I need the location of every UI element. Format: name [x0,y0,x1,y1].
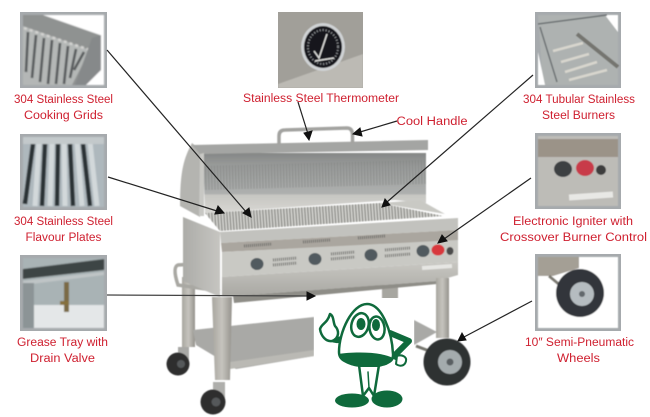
photo [23,258,104,328]
grate slats [26,32,84,84]
left side panel [183,217,220,297]
label: igniter: Crossover Burner Control [500,232,647,244]
label: cooking grids: 304 Stainless Steel [14,94,113,106]
valve nut [60,301,69,305]
grill [166,128,470,414]
top ridge [23,137,104,144]
arrow: flavour plates [108,177,224,214]
back left leg [182,277,195,347]
hood top bar [192,140,428,154]
label: grease tray: Drain Valve [30,353,95,365]
hood interior ribs [205,172,426,178]
label: igniter [500,216,647,244]
box lip [538,15,607,82]
mascot background [314,298,414,417]
arrow: grease tray [107,292,315,300]
head [339,304,393,364]
caster hub [177,360,185,368]
label: burners: Steel Burners [542,110,615,122]
wall [23,258,104,308]
label: igniter: Electronic Igniter with [513,216,633,228]
arrow: burners [382,75,533,207]
label [569,191,613,201]
label: cooking grids [14,94,113,122]
label: cool handle: Cool Handle [396,116,468,128]
hood interior [203,153,426,213]
grate surface [23,26,90,85]
back caster [166,347,190,376]
label: thermometer: Stainless Steel Thermometer [243,93,399,105]
white corners [538,15,618,85]
label: cooking grids: Cooking Grids [24,110,103,122]
thumbnail: cooking grids [20,12,107,88]
burner tubes [553,43,607,80]
pointing hand [320,314,338,341]
caster wheel [166,352,190,376]
hub [446,358,454,366]
thumbnail: thermometer [278,12,363,88]
small button [596,165,606,175]
frame [20,134,107,210]
frame [535,133,621,209]
right pupil [372,319,380,331]
frame [535,12,621,88]
lid front edge [199,153,204,216]
chassis [538,257,579,276]
label: flavour plates [14,216,113,244]
front caster [200,382,226,414]
bottom front panel [222,262,458,296]
frame [20,12,107,88]
arrow: wheels [458,301,532,341]
igniter button [446,247,454,255]
photo [538,15,618,85]
panel [538,136,618,206]
shelf front lip [230,350,314,369]
thumbnail: grease tray [20,255,107,331]
label: wheels [525,337,634,365]
bezel [301,23,345,71]
label: grease tray: Grease Tray with [17,337,108,349]
inner leg line [368,372,369,388]
corner post [75,35,101,85]
knob 2 [308,253,322,265]
handle [279,128,352,144]
grate tips [24,28,90,50]
white background [23,15,104,85]
arrow: thermometer [298,102,312,140]
frame [20,255,107,331]
thumbnail: wheels [535,254,621,331]
tyre [424,338,470,386]
strut [549,276,561,286]
knob 4 [416,245,430,257]
knob 1 [250,258,264,270]
rim [438,350,462,374]
front lip [220,218,458,243]
left pupil [356,318,366,330]
thumbnail: igniter [535,133,621,209]
label: wheels: Wheels [557,353,600,365]
label: flavour plates: 304 Stainless Steel [14,216,113,228]
front left leg [212,297,232,380]
caster bracket [178,347,189,367]
vents [244,236,410,265]
caster hub [212,398,220,406]
black knob [554,161,572,177]
base [23,137,104,207]
mascot [320,304,409,408]
photo [538,136,618,206]
brand plate [422,264,452,270]
grease tray [233,281,437,303]
green belly [339,353,393,367]
rim [570,282,594,306]
arrow: cooking grids [107,50,251,217]
arrow: igniter [438,178,531,243]
control panel [222,240,458,277]
side handle [175,264,220,291]
plate channels [25,144,90,206]
right hood end [380,200,445,214]
hub [579,291,585,297]
label: flavour plates: Flavour Plates [26,232,102,244]
red igniter [432,244,444,256]
right eye [368,316,386,340]
cooking grate [205,203,443,231]
right hand [396,355,406,366]
hood side [180,143,204,217]
vent strip [538,139,618,157]
rear wheel strut [416,346,432,352]
vent strip [221,230,458,252]
big wheel [424,338,470,386]
left eye [349,311,371,339]
label: burners [523,94,635,122]
right arm [390,333,409,360]
caster wheel [200,390,226,414]
light rail [23,272,104,285]
left foot [335,394,369,408]
thumbnail: flavour plates [20,134,107,210]
dial [304,26,342,68]
photo [538,257,618,328]
burner rail [577,34,618,67]
photo background [278,12,363,88]
caster bracket [213,382,225,404]
arrow: cool handle [353,121,397,136]
grate bars [200,207,450,225]
right foot [372,390,402,408]
needle [314,34,334,61]
highlights [35,142,97,206]
thumbnail: burners [535,12,621,88]
label: wheels: 10″ Semi-Pneumatic [525,337,634,349]
label: burners: 304 Tubular Stainless [523,94,635,106]
hood surface [23,15,100,85]
box [538,15,618,85]
front right leg [436,278,449,338]
legs [359,365,379,396]
lower shelf left [193,317,314,369]
white lower [23,305,104,328]
lower shelf right [414,320,437,345]
knob 3 [364,249,378,261]
leg [23,283,34,328]
valve [64,282,69,312]
red knob [576,160,594,176]
lower plate [278,54,363,88]
photo [23,137,104,207]
label: grease tray [17,337,108,365]
back right support [382,285,398,299]
frame [535,254,621,331]
photo [23,15,104,85]
background [538,257,618,328]
left arm [332,337,345,340]
tyre [556,269,604,317]
ticks [308,30,338,64]
dark rail [23,259,104,279]
